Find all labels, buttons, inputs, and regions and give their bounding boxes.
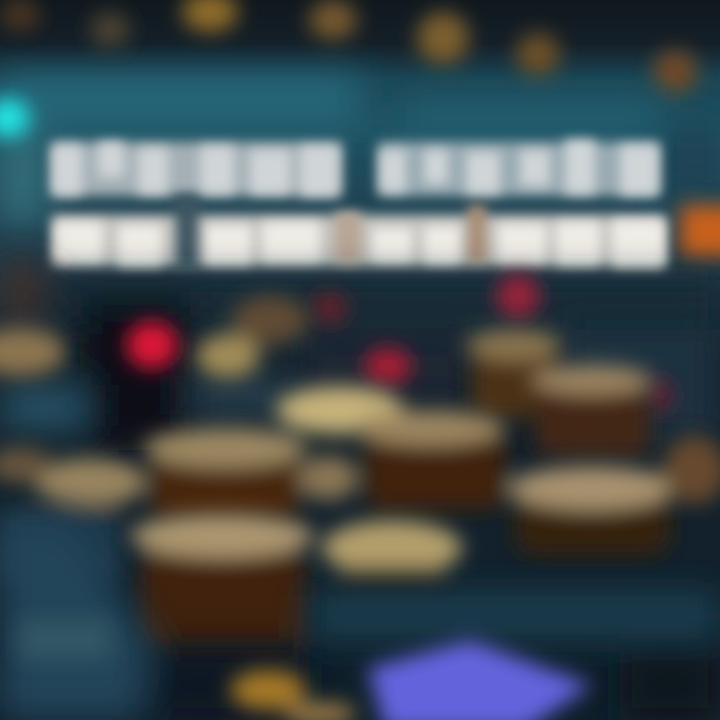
orange block on right — [680, 205, 720, 257]
chips back row — [0, 296, 652, 456]
red lights — [126, 274, 674, 411]
headline letter strokes, upper line — [52, 140, 658, 196]
glowing blue-violet tile — [368, 640, 592, 720]
dark midground — [0, 260, 720, 450]
chips front row — [130, 514, 462, 650]
top bulbs row — [0, 0, 697, 94]
chips middle row — [0, 386, 720, 580]
teal glow band and cyan light — [0, 75, 720, 225]
blue table foreground — [0, 520, 720, 720]
headline letter strokes, lower line — [55, 220, 664, 268]
gold chips bottom — [230, 670, 356, 720]
blurred white headline — [52, 142, 666, 267]
